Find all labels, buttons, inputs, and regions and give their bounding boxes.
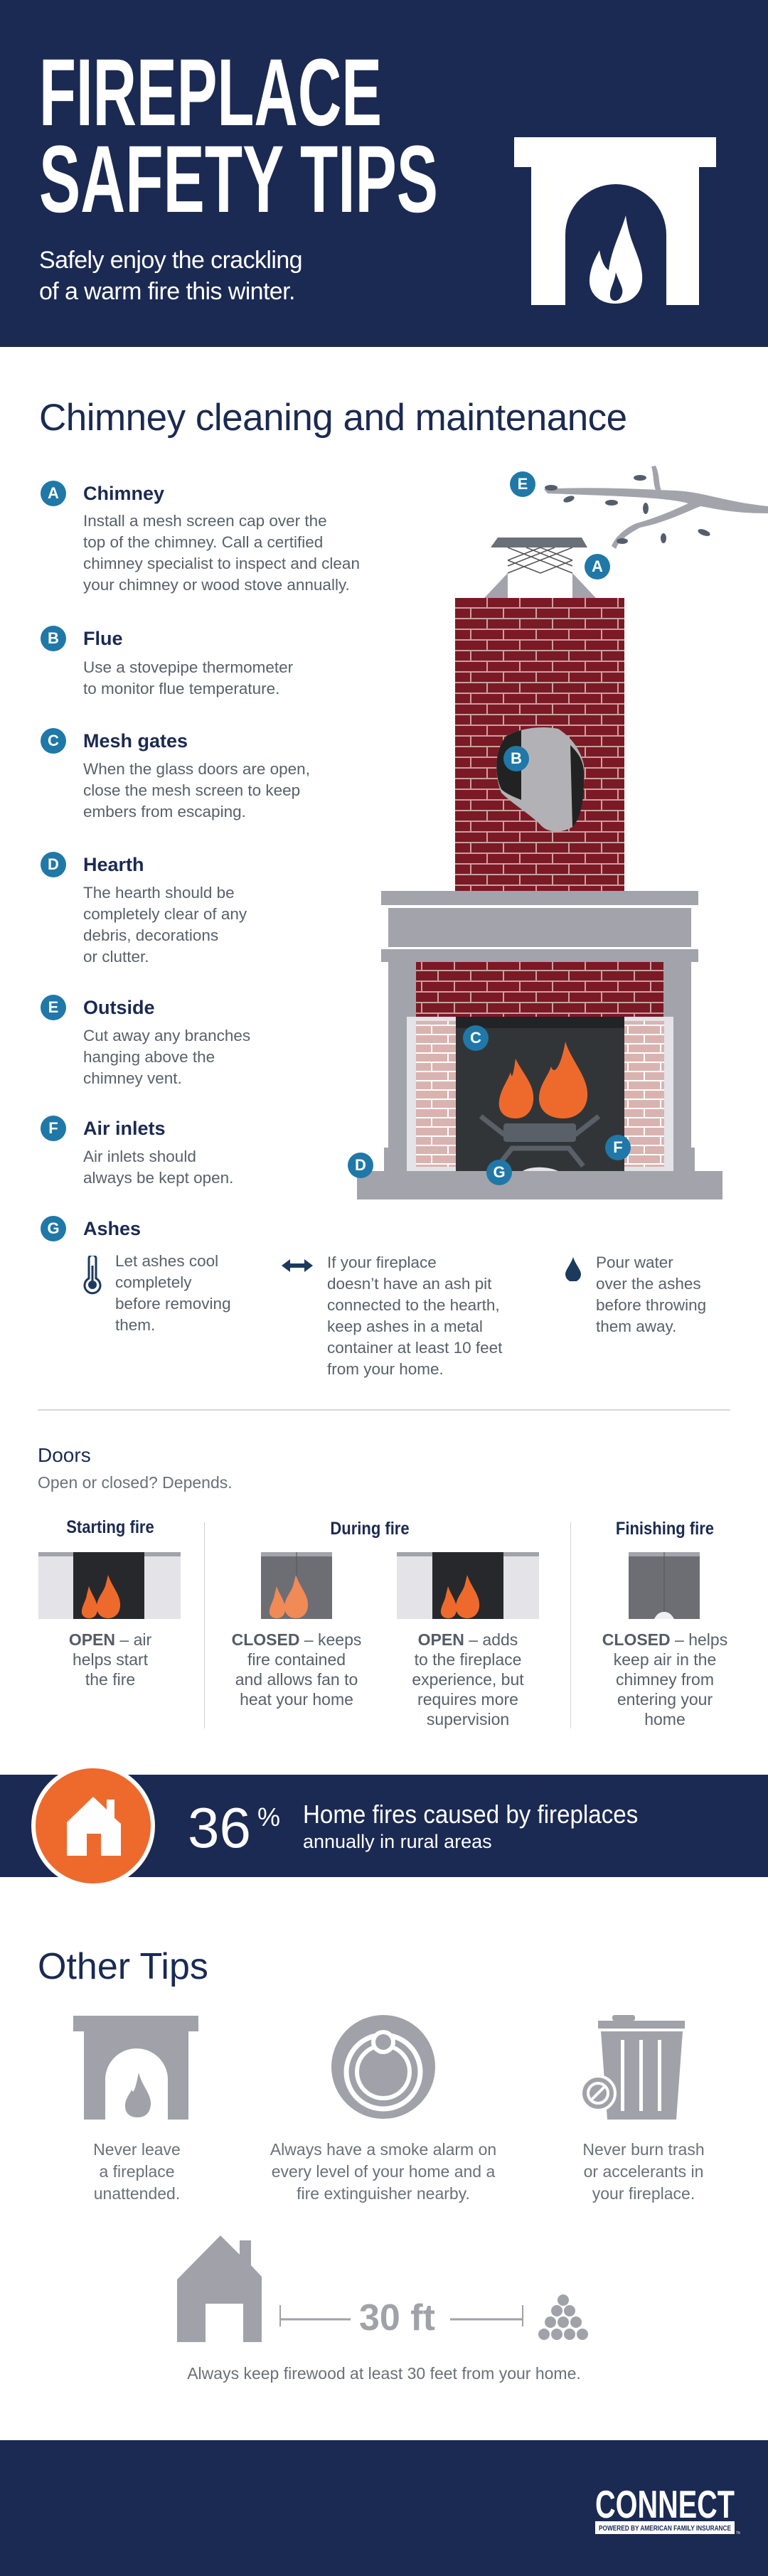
item C <box>41 728 310 821</box>
door column: starting fire: Starting fire <box>66 1517 154 1537</box>
door column: starting fire: helps start <box>73 1650 148 1669</box>
door column: during fire: experience, but <box>412 1670 524 1689</box>
item A: A <box>48 484 59 502</box>
door column: finishing fire: chimney from <box>616 1670 714 1689</box>
tip: smoke alarm: every level of your home and a <box>272 2162 495 2181</box>
door column: during fire: and allows fan to <box>235 1670 358 1689</box>
divider <box>38 1409 730 1411</box>
door column: finishing fire: CLOSED – helps <box>602 1630 727 1649</box>
item C: embers from escaping. <box>83 803 246 821</box>
tip: trash: or accelerants in <box>584 2162 703 2181</box>
hearth <box>384 1148 407 1171</box>
door column: starting fire: OPEN – air <box>69 1630 151 1649</box>
subtitle: of a warm fire this winter. <box>39 278 295 305</box>
tip: trash <box>582 2015 705 2203</box>
item A: top of the chimney. Call a certified <box>83 533 323 551</box>
door column: during fire: CLOSED – keeps <box>232 1630 361 1649</box>
item B: to monitor flue temperature. <box>83 680 279 698</box>
icon: double arrow <box>282 1259 313 1272</box>
text: D <box>355 1156 366 1174</box>
item C: Mesh gates <box>83 730 188 752</box>
icon: thermometer <box>84 1256 101 1294</box>
door column: during fire: During fire <box>330 1519 410 1539</box>
item E: chimney vent. <box>83 1069 182 1087</box>
tip: trash: Never burn trash <box>582 2140 705 2159</box>
text: C <box>470 1029 481 1047</box>
item G: ashes: before removing <box>115 1295 231 1313</box>
item G: ashes: container at least 10 feet <box>327 1339 502 1357</box>
item E: Cut away any branches <box>83 1027 250 1044</box>
item D <box>41 852 247 966</box>
door column: finishing fire: keep air in the <box>614 1650 716 1669</box>
tip: smoke alarm <box>270 2015 496 2203</box>
door column: starting fire <box>38 1517 181 1689</box>
item D: or clutter. <box>83 948 149 966</box>
firewood distance graphic <box>177 2235 588 2342</box>
branch <box>544 466 768 549</box>
item D: debris, decorations <box>83 926 218 944</box>
door column: during fire: fire contained <box>247 1650 346 1669</box>
stat banner: % <box>257 1802 280 1832</box>
door column: during fire: to the fireplace <box>415 1650 521 1669</box>
icon: firewood stack <box>538 2294 588 2340</box>
stat banner <box>0 1775 768 1877</box>
item E: Outside <box>83 997 155 1018</box>
door column: starting fire: the fire <box>85 1670 135 1689</box>
doors heading: Open or closed? Depends. <box>38 1473 233 1492</box>
stat: 36 <box>188 1796 251 1859</box>
item A <box>41 481 360 594</box>
firebox <box>456 1017 624 1171</box>
item G: ashes: G <box>47 1219 60 1237</box>
flames <box>499 1059 533 1118</box>
tip: fireplace <box>73 2016 198 2203</box>
item G: ashes: keep ashes in a metal <box>327 1318 483 1335</box>
icon: water drop <box>565 1257 581 1281</box>
doors heading: Doors <box>38 1444 91 1466</box>
item G: ashes: from your home. <box>327 1360 444 1378</box>
item F: Air inlets should <box>83 1148 196 1165</box>
item A: Install a mesh screen cap over the <box>83 512 327 530</box>
stat banner: Home fires caused by fireplaces <box>303 1800 638 1829</box>
door column: finishing fire: home <box>644 1710 686 1728</box>
item A: Chimney <box>83 483 164 504</box>
item B <box>41 626 293 698</box>
item G: ashes: completely <box>115 1273 192 1291</box>
side panels <box>407 1017 456 1171</box>
item F: F <box>48 1119 58 1137</box>
item B: B <box>48 629 59 647</box>
item D: Hearth <box>83 854 144 875</box>
item A: your chimney or wood stove annually. <box>83 576 350 594</box>
text: G <box>493 1163 506 1181</box>
icon: house <box>177 2235 262 2342</box>
icon: house in orange circle <box>31 1768 155 1883</box>
text: B <box>511 749 522 767</box>
arrow: 30 ft measure <box>279 2305 523 2326</box>
item G: ashes: Let ashes cool <box>115 1252 218 1270</box>
chimney illustration <box>357 466 768 1199</box>
item G: ashes <box>41 1216 706 1378</box>
icon: fireplace <box>514 137 716 305</box>
tip: fireplace: unattended. <box>94 2184 180 2203</box>
header panel <box>0 0 768 347</box>
brick chimney <box>455 598 624 891</box>
item G: ashes: Ashes <box>83 1218 141 1239</box>
tip: trash: your fireplace. <box>592 2184 695 2203</box>
item D: completely clear of any <box>83 905 247 923</box>
item F: always be kept open. <box>83 1169 233 1187</box>
grate <box>481 1116 599 1134</box>
door column: during fire: supervision <box>427 1710 509 1728</box>
item C: close the mesh screen to keep <box>83 781 300 799</box>
item G: ashes: connected to the hearth, <box>327 1296 500 1314</box>
text: A <box>592 557 603 575</box>
item E: E <box>48 998 58 1016</box>
item G: ashes: them away. <box>596 1318 676 1335</box>
door column: finishing fire <box>602 1519 727 1728</box>
doors heading <box>38 1444 233 1492</box>
tip: fireplace: a fireplace <box>99 2162 175 2181</box>
item E: hanging above the <box>83 1048 215 1066</box>
flue opening <box>496 727 584 831</box>
item D: The hearth should be <box>83 884 235 902</box>
item D: D <box>48 855 59 873</box>
tip: fireplace: Never leave <box>93 2140 181 2159</box>
item E <box>41 995 250 1087</box>
item C: C <box>48 732 59 749</box>
item G: ashes: them. <box>115 1316 155 1334</box>
item G: ashes: over the ashes <box>596 1275 701 1293</box>
title <box>39 40 438 228</box>
footer <box>0 2440 768 2576</box>
door column: during fire: OPEN – adds <box>418 1630 518 1649</box>
subtitle <box>39 247 302 305</box>
item C: When the glass doors are open, <box>83 760 310 778</box>
item A: chimney specialist to inspect and clean <box>83 555 360 572</box>
label circles on illustration <box>510 471 535 497</box>
label circles on illustration: E <box>518 475 528 493</box>
door column: during fire: requires more <box>417 1690 518 1709</box>
door column: finishing fire: entering your <box>617 1690 713 1709</box>
door column: during fire <box>232 1519 539 1728</box>
firewood distance graphic: 30 ft <box>359 2297 435 2339</box>
item B: Use a stovepipe thermometer <box>83 658 293 676</box>
item G: ashes: Pour water <box>596 1254 673 1271</box>
door dividers <box>204 1522 205 1728</box>
tip: smoke alarm: fire extinguisher nearby. <box>297 2184 470 2203</box>
heading: chimney cleaning: Chimney cleaning and maintenance <box>39 397 627 439</box>
item F: Air inlets <box>83 1118 166 1139</box>
item B: Flue <box>83 628 123 649</box>
chimney cap <box>484 538 596 598</box>
stat banner: annually in rural areas <box>303 1831 492 1852</box>
subtitle: Safely enjoy the crackling <box>39 247 302 274</box>
tip: smoke alarm: Always have a smoke alarm on <box>270 2140 496 2159</box>
heading: other tips: Other Tips <box>38 1946 208 1987</box>
mantel <box>381 891 698 905</box>
text: F <box>613 1138 623 1156</box>
item G: ashes: doesn’t have an ash pit <box>327 1275 491 1293</box>
item G: ashes: If your fireplace <box>327 1254 437 1271</box>
firewood caption: Always keep firewood at least 30 feet from your home. <box>187 2364 581 2383</box>
item F <box>41 1116 233 1187</box>
door column: finishing fire: Finishing fire <box>616 1519 714 1539</box>
door column: during fire: heat your home <box>240 1690 353 1709</box>
item G: ashes: before throwing <box>596 1296 706 1314</box>
